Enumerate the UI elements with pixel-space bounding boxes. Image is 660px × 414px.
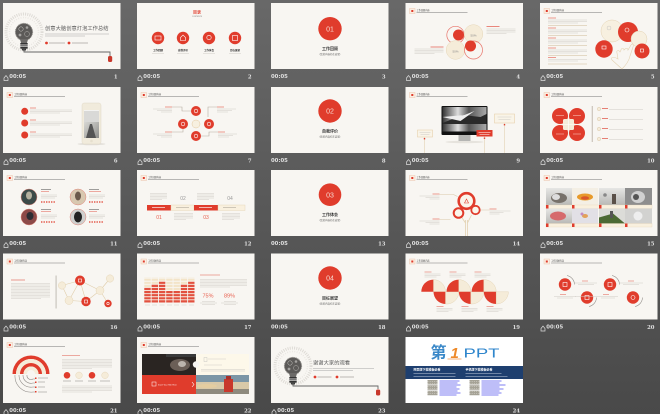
- quarter arcs and legend: [15, 375, 48, 392]
- bubble chart: [595, 20, 650, 58]
- navy band: 网页版下载模板必看: [414, 366, 441, 372]
- slide 12: timeline: [137, 170, 254, 248]
- footer 6: 6: [114, 158, 118, 164]
- section subtitle: (您的内容打在这里): [320, 302, 341, 306]
- presenter bullets: [314, 376, 354, 378]
- heading: [192, 8, 203, 18]
- step numbers: [156, 196, 233, 221]
- icon row: [63, 372, 110, 381]
- footer 3: 3: [382, 74, 386, 80]
- list items: [21, 108, 72, 138]
- logo: 1: [450, 345, 459, 362]
- slide 10: clover: [540, 87, 658, 164]
- footer 20: 00:05: [546, 324, 563, 330]
- clover diagram: [552, 108, 585, 141]
- stat notes: [200, 302, 238, 304]
- slide 22: photo panels: [137, 337, 254, 414]
- footer 8: 00:05: [271, 158, 288, 164]
- slide header: 工作回顾内容: [148, 258, 162, 262]
- cream text panel: [193, 354, 249, 375]
- left text list: [548, 18, 587, 64]
- section subtitle: (您的内容打在这里): [320, 134, 341, 138]
- step numbers: 03: [203, 215, 209, 221]
- contents item 3: 工作体会: [204, 48, 214, 52]
- slide 8: section 02: [271, 87, 388, 164]
- percent stats: 75%: [202, 294, 214, 300]
- footer 9: 9: [516, 158, 520, 164]
- step numbers: 02: [180, 196, 186, 202]
- slide header: 工作回顾内容: [14, 175, 28, 179]
- footer 6: 00:05: [9, 158, 26, 164]
- paragraph: [62, 356, 112, 368]
- slide 2: contents: [137, 3, 254, 80]
- logo: [430, 343, 500, 362]
- footer 18: [271, 324, 386, 331]
- callout right: [494, 114, 514, 125]
- title: 谢谢大家的观看: [313, 358, 350, 366]
- number badge: 03: [326, 192, 334, 199]
- right note: [486, 26, 516, 34]
- footer 18: 00:05: [271, 324, 288, 330]
- text block: [11, 280, 50, 298]
- slide header: 工作回顾内容: [416, 258, 430, 262]
- footer 14: [406, 241, 520, 248]
- slide 17: bar chart: [137, 254, 254, 331]
- contents item 1: 工作回顾: [153, 48, 163, 52]
- footer 17: 00:05: [143, 324, 160, 330]
- phone: [78, 103, 106, 145]
- slide header: 工作回顾内容: [416, 175, 430, 179]
- footer 5: 5: [651, 74, 655, 80]
- slide header: 工作回顾内容: [551, 258, 565, 262]
- slide 3: section 01: [271, 3, 388, 80]
- title: 创意大脑创意灯泡工作总结: [45, 24, 109, 32]
- callout red: [476, 130, 492, 139]
- icon: light bulb with wire and mouse: [6, 14, 112, 62]
- step text: [150, 194, 240, 220]
- circles and arcs: [559, 276, 642, 306]
- footer 17: [138, 324, 252, 331]
- percent stats: 89%: [224, 294, 235, 300]
- logo: PPT: [464, 346, 500, 360]
- monitor: [442, 106, 488, 143]
- footer 19: 00:05: [412, 324, 429, 330]
- section subtitle: (您的内容打在这里): [320, 52, 341, 56]
- slide 5: speech bubbles and hand: [540, 3, 658, 80]
- callout left: [418, 130, 432, 139]
- number badge: 04: [326, 276, 334, 282]
- slide 19: wave quarters: [406, 254, 523, 331]
- footer 22: 00:05: [143, 408, 160, 414]
- footer 18: 18: [378, 325, 386, 331]
- footer 3: 00:05: [271, 74, 288, 80]
- footer 13: 00:05: [271, 241, 288, 247]
- notes above: [424, 272, 490, 277]
- captions row 1: [546, 205, 652, 208]
- footer 10: 10: [647, 158, 655, 164]
- rainbow chart: [12, 356, 50, 374]
- footer 4: [406, 74, 520, 80]
- footer 9: [406, 158, 520, 164]
- slide header: 工作回顾内容: [416, 92, 430, 96]
- link lists: [440, 381, 506, 395]
- footer 2: [138, 74, 252, 80]
- slide header: 工作回顾内容: [551, 92, 565, 96]
- footer 8: 8: [382, 158, 386, 164]
- slide 15: photo grid: [540, 170, 658, 248]
- footer 2: 00:05: [143, 74, 160, 80]
- heading: 目录: [193, 8, 201, 14]
- slide 4: four petals: [406, 3, 523, 80]
- footer 5: [541, 74, 655, 80]
- slide 14: ring tree: [406, 170, 523, 248]
- footer 11: 11: [110, 242, 118, 248]
- footer 11: [4, 241, 118, 248]
- footer 4: 4: [516, 74, 520, 80]
- section subtitle: (您的内容打在这里): [320, 218, 341, 222]
- tree stem: [462, 215, 472, 236]
- bottom text: [62, 386, 112, 392]
- slide header: 工作回顾内容: [551, 175, 565, 179]
- navy band: [406, 366, 523, 379]
- red banner: Insert Your Title Here: [158, 384, 178, 386]
- footer 12: 12: [244, 242, 252, 248]
- hand outline: [612, 44, 633, 69]
- slide 1: cover: [3, 3, 120, 80]
- footer 6: [4, 158, 118, 164]
- wave shapes: [421, 280, 508, 304]
- footer 19: 19: [513, 325, 520, 331]
- step numbers: 01: [156, 215, 162, 221]
- side notes: [153, 107, 237, 137]
- footer 7: 7: [248, 158, 252, 164]
- notes below: [436, 306, 502, 312]
- footer 1: 1: [114, 74, 118, 80]
- dark photo: [142, 354, 196, 375]
- footer 15: [541, 241, 655, 248]
- slide 16: network: [3, 254, 120, 331]
- connectors: [440, 194, 490, 220]
- slide header: 工作回顾内容: [14, 92, 28, 96]
- footer 8: [271, 158, 386, 164]
- slide 9: monitor: [406, 87, 523, 164]
- footer 16: 16: [110, 325, 118, 331]
- divider: [55, 276, 57, 308]
- ring nodes: [454, 193, 480, 218]
- petal chart: 50%: [470, 34, 477, 38]
- slide header: 工作回顾内容: [14, 342, 28, 346]
- petal chart: 50%: [452, 50, 459, 54]
- slide 24: promo: [406, 337, 523, 414]
- portraits: [21, 189, 86, 225]
- slide 11: team profiles: [3, 170, 120, 248]
- section title: 工作回顾: [322, 45, 338, 51]
- footer 1: 00:05: [9, 74, 26, 80]
- petal chart: [446, 25, 483, 59]
- footer 12: 00:05: [143, 241, 160, 247]
- step numbers: 04: [227, 196, 233, 202]
- photos row 1: [546, 188, 652, 205]
- footer 13: 13: [378, 242, 386, 248]
- footer 21: [4, 408, 118, 414]
- section title: 目标展望: [322, 294, 338, 300]
- footer 9: 00:05: [412, 158, 429, 164]
- slide header: 工作回顾内容: [416, 8, 430, 12]
- footer 13: [271, 241, 386, 248]
- logo: 第: [430, 343, 447, 362]
- timeline bar: [147, 205, 245, 210]
- footer 12: [138, 241, 252, 248]
- footer 10: [541, 158, 655, 164]
- notes: [420, 194, 510, 224]
- footer 16: 00:05: [9, 324, 26, 330]
- footer 15: 15: [647, 242, 655, 248]
- profile text: [41, 190, 105, 222]
- footer 4: 00:05: [412, 74, 429, 80]
- lighthouse photo: [196, 375, 249, 394]
- footer 17: 17: [244, 325, 252, 331]
- icon: light bulb with wire and mouse: [275, 348, 380, 396]
- number badge: 01: [326, 26, 334, 33]
- heading: CONTENTS: [192, 16, 203, 18]
- subtitle lines: [313, 368, 374, 370]
- notes: [554, 281, 643, 298]
- footer 21: 00:05: [9, 408, 26, 414]
- footer 20: 20: [647, 325, 655, 331]
- item list: [597, 107, 643, 141]
- footer 1: [4, 74, 118, 80]
- vertical callout lines: [424, 123, 504, 153]
- presenter bullets: [45, 42, 88, 44]
- footer 14: 14: [513, 242, 520, 248]
- percent stats: [202, 294, 235, 300]
- slide 13: section 03: [271, 170, 388, 248]
- paragraph: [200, 275, 247, 287]
- footer 7: 00:05: [143, 158, 160, 164]
- footer 10: 00:05: [546, 158, 563, 164]
- slide header: 工作回顾内容: [551, 8, 565, 12]
- footer 5: 00:05: [546, 74, 563, 80]
- slide header: 工作回顾内容: [148, 342, 162, 346]
- footer 23: [272, 408, 386, 414]
- slide 20: four circled icons: [540, 254, 658, 331]
- slide header: 工作回顾内容: [148, 92, 162, 96]
- footer 15: 00:05: [546, 241, 563, 247]
- connector lines: [172, 107, 218, 136]
- captions row 2: [546, 224, 652, 227]
- node circles: [178, 106, 214, 141]
- footer 19: [406, 324, 520, 331]
- number badge: 02: [326, 109, 334, 116]
- slide header: 工作回顾内容: [148, 175, 162, 179]
- left note: [414, 47, 444, 54]
- photos row 2: [546, 208, 652, 224]
- slide 18: section 04: [271, 254, 388, 331]
- section title: 工作体会: [322, 211, 338, 217]
- slide 7: cross diagram: [137, 87, 254, 164]
- footer 2: 2: [248, 74, 252, 80]
- subtitle lines: [45, 34, 109, 36]
- section title: 自我评价: [322, 128, 338, 134]
- footer 3: [271, 74, 386, 80]
- slide header: 工作回顾内容: [14, 258, 28, 262]
- contents item 2: 自我评价: [178, 48, 188, 52]
- footer 23: 00:05: [277, 408, 294, 414]
- contents item 4: 目标展望: [230, 48, 240, 52]
- footer 16: [4, 324, 118, 331]
- network graph: [58, 275, 114, 307]
- footer 14: 00:05: [412, 241, 429, 247]
- slide 6: phone mockup: [3, 87, 120, 164]
- navy band: 手机版下载模板必看: [466, 366, 493, 372]
- footer 11: 00:05: [9, 241, 26, 247]
- footer 7: [138, 158, 252, 164]
- slide 23: thanks: [271, 337, 388, 414]
- slide 21: rainbow: [3, 337, 120, 414]
- divider: [591, 106, 594, 142]
- QR codes: [428, 380, 480, 396]
- striped bar chart: [145, 278, 194, 305]
- footer 22: [138, 408, 252, 414]
- footer 20: [541, 324, 655, 331]
